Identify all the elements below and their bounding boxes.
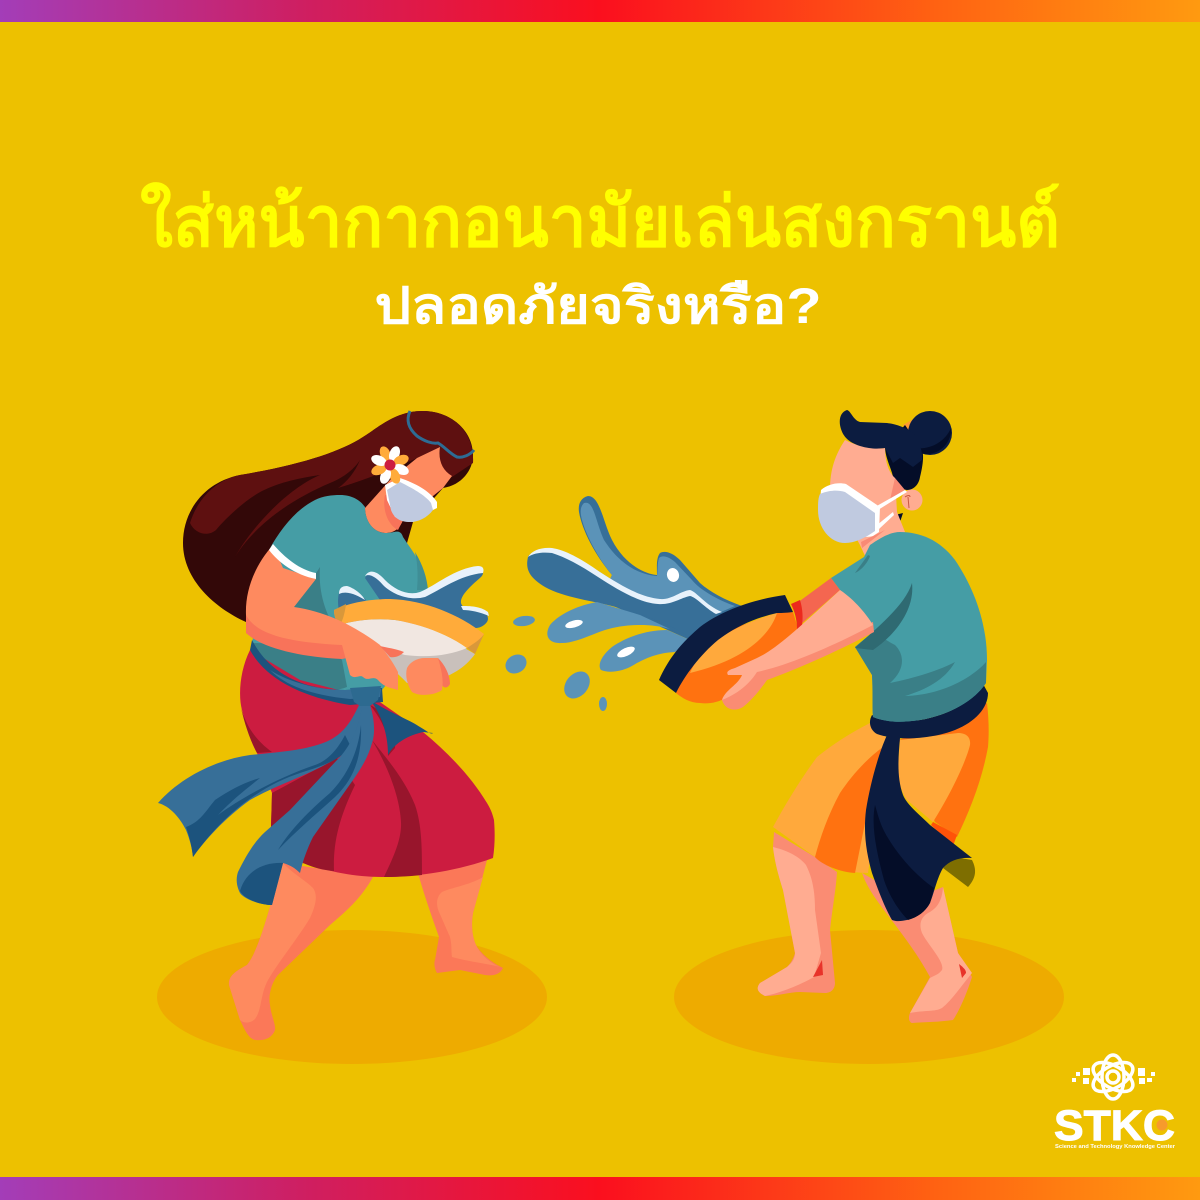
left wave	[338, 587, 366, 615]
water in woman's bowl	[338, 566, 489, 628]
bowl inner	[340, 619, 467, 656]
mask straps	[875, 490, 907, 529]
man sleeve shadow	[855, 583, 912, 650]
fingers	[406, 658, 443, 695]
mask white edge	[820, 483, 880, 537]
man ear	[902, 490, 922, 510]
man front leg accent	[813, 960, 823, 977]
trousers right light	[898, 733, 970, 822]
man neck hair tuft	[895, 513, 903, 522]
man front leg light	[758, 847, 821, 996]
man legs	[758, 832, 972, 1023]
man hair bun	[908, 411, 952, 455]
woman sleeve cuff	[269, 544, 316, 579]
logo pixel squares	[1072, 1068, 1155, 1084]
right wave crest	[365, 566, 483, 598]
woman figure	[158, 411, 503, 1040]
main stream	[527, 551, 722, 637]
man ear line	[905, 496, 910, 508]
skirt fold shadows	[241, 705, 422, 877]
STKC logo	[1054, 1055, 1176, 1150]
man front arm and hand	[722, 590, 873, 700]
woman second hand	[406, 658, 450, 695]
trousers left dark wedge	[815, 747, 883, 873]
front leg base	[229, 863, 373, 1040]
logo atom icon	[1088, 1055, 1138, 1099]
man drape shadow	[874, 805, 934, 920]
woman thumb shade	[380, 646, 404, 657]
title line 2: ปลอดภัยจริงหรือ?	[374, 278, 822, 334]
man sash tail underside	[943, 858, 975, 887]
man red cuff	[791, 600, 803, 630]
lower left fold	[271, 758, 355, 871]
woman shirt shadow	[252, 567, 347, 690]
left fold	[241, 708, 272, 753]
man face shadow	[861, 478, 905, 548]
rear leg light	[437, 877, 500, 967]
woman front leg	[229, 863, 373, 1040]
petals	[370, 445, 410, 485]
lower streamer crease	[278, 725, 361, 850]
bowl orange	[676, 612, 799, 703]
woman skirt	[240, 650, 495, 877]
man hair bun tie	[903, 418, 924, 448]
bowl rim	[334, 599, 484, 648]
splash highlights	[564, 567, 681, 660]
trousers corner	[931, 822, 957, 846]
top plume	[579, 496, 742, 640]
left streamer shade	[186, 735, 350, 857]
woman neck shadow	[384, 495, 403, 530]
woman's bowl	[334, 599, 484, 683]
woman shirt	[252, 495, 430, 692]
bowl rim	[659, 595, 793, 693]
woman hair highlights	[190, 411, 473, 557]
right sash tail	[370, 700, 433, 755]
flower centre	[384, 460, 396, 470]
rim transparent right end	[467, 634, 484, 654]
ground shadow: woman	[157, 930, 547, 1064]
top gradient bar	[0, 0, 1200, 22]
mask white edge	[385, 478, 437, 522]
woman neck strap and mask	[385, 478, 437, 522]
man shirt	[831, 532, 987, 722]
man bun shadow	[915, 428, 951, 454]
man rear leg base	[862, 873, 972, 1023]
man back arm	[797, 578, 840, 625]
man front hair	[840, 410, 922, 467]
man belt	[870, 682, 988, 738]
man front leg base	[758, 832, 837, 996]
bowl underside	[340, 619, 475, 683]
long left streamer	[158, 703, 370, 857]
lower right jet	[600, 630, 690, 672]
front leg light	[229, 863, 316, 1022]
man trousers	[773, 703, 989, 873]
title line 1: ใส่หน้ากากอนามัยเล่นสงกรานต์	[140, 181, 1060, 261]
lower left jet	[547, 602, 670, 643]
man's bowl	[659, 595, 799, 703]
belt light band	[270, 670, 381, 699]
splash tail highlight	[461, 606, 489, 616]
woman sash	[158, 640, 433, 905]
man mask	[818, 483, 907, 543]
top plume light	[581, 503, 735, 625]
man figure	[659, 410, 989, 1023]
logo tagline: Science and Technology Knowledge Center	[1055, 1144, 1176, 1150]
man rear leg accent	[959, 964, 966, 978]
trousers right base	[899, 703, 989, 837]
bowl light	[690, 613, 777, 673]
bottom gradient bar	[0, 1177, 1200, 1200]
finger shade	[438, 658, 450, 688]
lower streamer	[237, 705, 374, 905]
lower streamer dark end	[240, 863, 283, 905]
logo orange dot	[1156, 1120, 1168, 1130]
woman face and neck	[365, 447, 452, 533]
woman headband	[408, 411, 474, 457]
man rear leg light	[910, 887, 972, 1013]
man front arm shadow	[722, 622, 874, 710]
woman arm and hand	[246, 545, 398, 690]
water droplets	[502, 615, 607, 711]
centre fold	[372, 740, 422, 877]
woman rear leg	[418, 860, 503, 975]
woman shirt right shade	[415, 552, 428, 590]
rear leg base	[418, 860, 503, 975]
ground shadow: man	[674, 930, 1064, 1064]
mask fabric	[387, 482, 433, 522]
man drape	[865, 735, 972, 921]
man shoulder shadow	[855, 555, 870, 573]
trousers left light	[773, 723, 887, 873]
left wave crest	[339, 586, 365, 600]
man shirt lower shadow	[855, 632, 986, 722]
rim transparent left end	[334, 604, 346, 625]
title	[140, 181, 1060, 334]
man face and neck	[830, 440, 905, 558]
flower	[370, 445, 410, 485]
man back hair	[885, 425, 923, 490]
belt	[250, 640, 383, 705]
water splash	[502, 496, 742, 711]
upper fold	[370, 705, 395, 756]
logo wordmark: STKC	[1054, 1102, 1175, 1150]
main stream white crest	[528, 548, 722, 614]
right wave	[365, 570, 488, 628]
woman back hair	[183, 411, 473, 622]
woman arm shadow	[246, 610, 362, 659]
mask fabric	[818, 491, 875, 543]
sash knot	[350, 686, 381, 706]
